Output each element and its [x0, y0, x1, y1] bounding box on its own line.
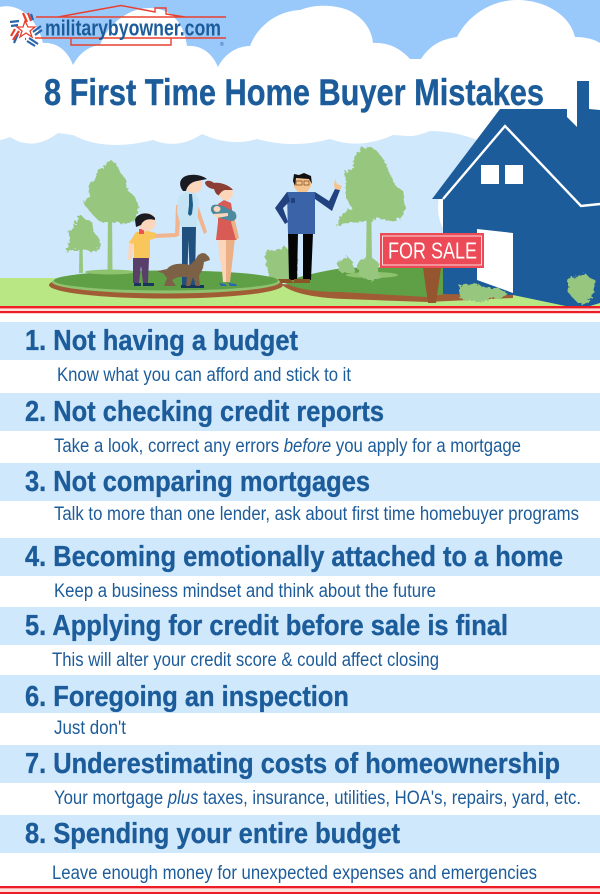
divider pink — [0, 308, 600, 311]
realtor glasses — [296, 181, 309, 185]
heading: 1. Not having a budget — [25, 325, 298, 357]
mother shoes — [219, 283, 237, 286]
dog — [158, 253, 210, 286]
bushes by door — [459, 284, 506, 302]
top divider band — [0, 306, 600, 322]
right trunk — [366, 190, 372, 262]
island soil — [281, 284, 513, 302]
right crown — [336, 147, 405, 227]
bush right — [568, 273, 595, 304]
lawn shadow — [346, 272, 398, 278]
description: This will alter your credit score & could affect closing — [52, 650, 439, 671]
mistake 2 — [0, 393, 600, 457]
realtor pocket — [291, 198, 295, 203]
grass — [0, 278, 600, 306]
house — [432, 81, 600, 309]
divider red bottom — [0, 892, 600, 894]
child shirt — [129, 231, 156, 258]
sign post — [423, 268, 441, 303]
father arm skin — [175, 205, 207, 236]
description: Leave enough money for unexpected expenses and emergencies — [52, 863, 537, 884]
band — [0, 393, 600, 431]
island lawn — [283, 266, 445, 297]
realtor — [275, 173, 342, 283]
mistake 4 — [0, 538, 600, 602]
heading: 2. Not checking credit reports — [25, 396, 384, 428]
white halo — [438, 197, 443, 228]
heading: 3. Not comparing mortgages — [25, 466, 370, 498]
child legs — [133, 258, 149, 283]
tree: small — [65, 214, 100, 273]
sign border — [382, 236, 482, 265]
band — [0, 538, 600, 576]
baby face — [214, 206, 220, 212]
band — [0, 815, 600, 853]
island, right — [281, 266, 513, 302]
realtor trousers — [288, 233, 313, 280]
family — [128, 175, 239, 288]
realtor right arm — [315, 189, 340, 211]
realtor head — [294, 177, 311, 192]
baby — [211, 205, 236, 221]
heading: 5. Applying for credit before sale is final — [25, 610, 508, 642]
father shoes — [181, 285, 204, 288]
father hair — [180, 175, 207, 191]
for sale sign — [380, 233, 484, 303]
divider white — [0, 306, 600, 322]
father head — [184, 175, 202, 193]
father shirt — [177, 192, 199, 227]
child — [128, 213, 177, 286]
realtor shirt — [287, 192, 315, 234]
lawn highlight — [85, 270, 135, 274]
mother arm — [231, 216, 239, 240]
child arm to father — [154, 233, 177, 238]
tall trunk — [108, 210, 112, 272]
roof outline — [443, 126, 600, 206]
logo star — [10, 13, 42, 46]
island rim — [52, 270, 280, 294]
divider pink — [0, 888, 600, 892]
mother — [205, 181, 239, 286]
logo house outline — [35, 6, 226, 45]
sky — [0, 0, 600, 150]
island soil — [49, 272, 283, 298]
logo — [10, 6, 226, 48]
island, left — [49, 270, 283, 298]
bushes by tree — [338, 256, 380, 281]
panel: illustrated header — [0, 0, 600, 309]
realtor left arm — [275, 192, 290, 224]
child head — [138, 213, 156, 231]
realtor shoes — [278, 279, 310, 283]
small crown — [65, 214, 100, 252]
mistake 3 — [0, 463, 600, 525]
mother hair — [205, 181, 233, 195]
light sky — [0, 125, 600, 285]
window left — [481, 165, 499, 184]
description: Just don't — [54, 718, 127, 739]
heading: 6. Foregoing an inspection — [25, 681, 349, 713]
registered mark: ® — [220, 41, 224, 48]
realtor hand — [334, 179, 342, 190]
mistake 7 — [0, 745, 600, 809]
child collar — [139, 229, 144, 234]
mother forearm — [213, 213, 228, 218]
mistake 5 — [0, 607, 600, 671]
tree and bushes, centre — [265, 147, 405, 280]
mother head — [219, 186, 233, 200]
heading: 8. Spending your entire budget — [25, 818, 400, 850]
mother dress — [216, 200, 237, 240]
small trunk — [79, 240, 83, 273]
band — [0, 463, 600, 501]
sign board — [380, 233, 484, 268]
description: Take a look, correct any errors before you apply for a mortgage — [54, 436, 521, 457]
child shoes — [134, 283, 154, 286]
mistake 8 — [0, 815, 600, 884]
child hair — [135, 213, 155, 227]
tree: right — [336, 147, 405, 262]
band — [0, 322, 600, 360]
mother legs — [218, 238, 228, 282]
band — [0, 745, 600, 783]
realtor hair — [293, 173, 312, 186]
tall crown — [83, 160, 139, 224]
bush behind realtor — [265, 247, 298, 280]
bottom divider — [0, 886, 600, 894]
description: Know what you can afford and stick to it — [57, 365, 352, 386]
band — [0, 607, 600, 645]
logo wordmark: militarybyowner.com — [45, 16, 221, 40]
mistake 6 — [0, 675, 600, 739]
divider red bottom — [0, 311, 600, 313]
divider red top — [0, 886, 600, 888]
door — [477, 229, 513, 293]
father trousers — [182, 227, 196, 285]
sign text: FOR SALE — [388, 238, 477, 264]
clouds — [0, 0, 600, 145]
trees, left — [65, 160, 139, 273]
mistake 1 — [0, 322, 600, 386]
father tie — [188, 194, 193, 216]
father — [175, 175, 207, 288]
divider red top — [0, 306, 600, 308]
band — [0, 675, 600, 713]
island lawn — [54, 270, 278, 290]
description: Keep a business mindset and think about the future — [54, 581, 436, 602]
house body and roof — [432, 81, 600, 309]
window right — [505, 165, 523, 184]
tree: tall — [83, 160, 139, 272]
